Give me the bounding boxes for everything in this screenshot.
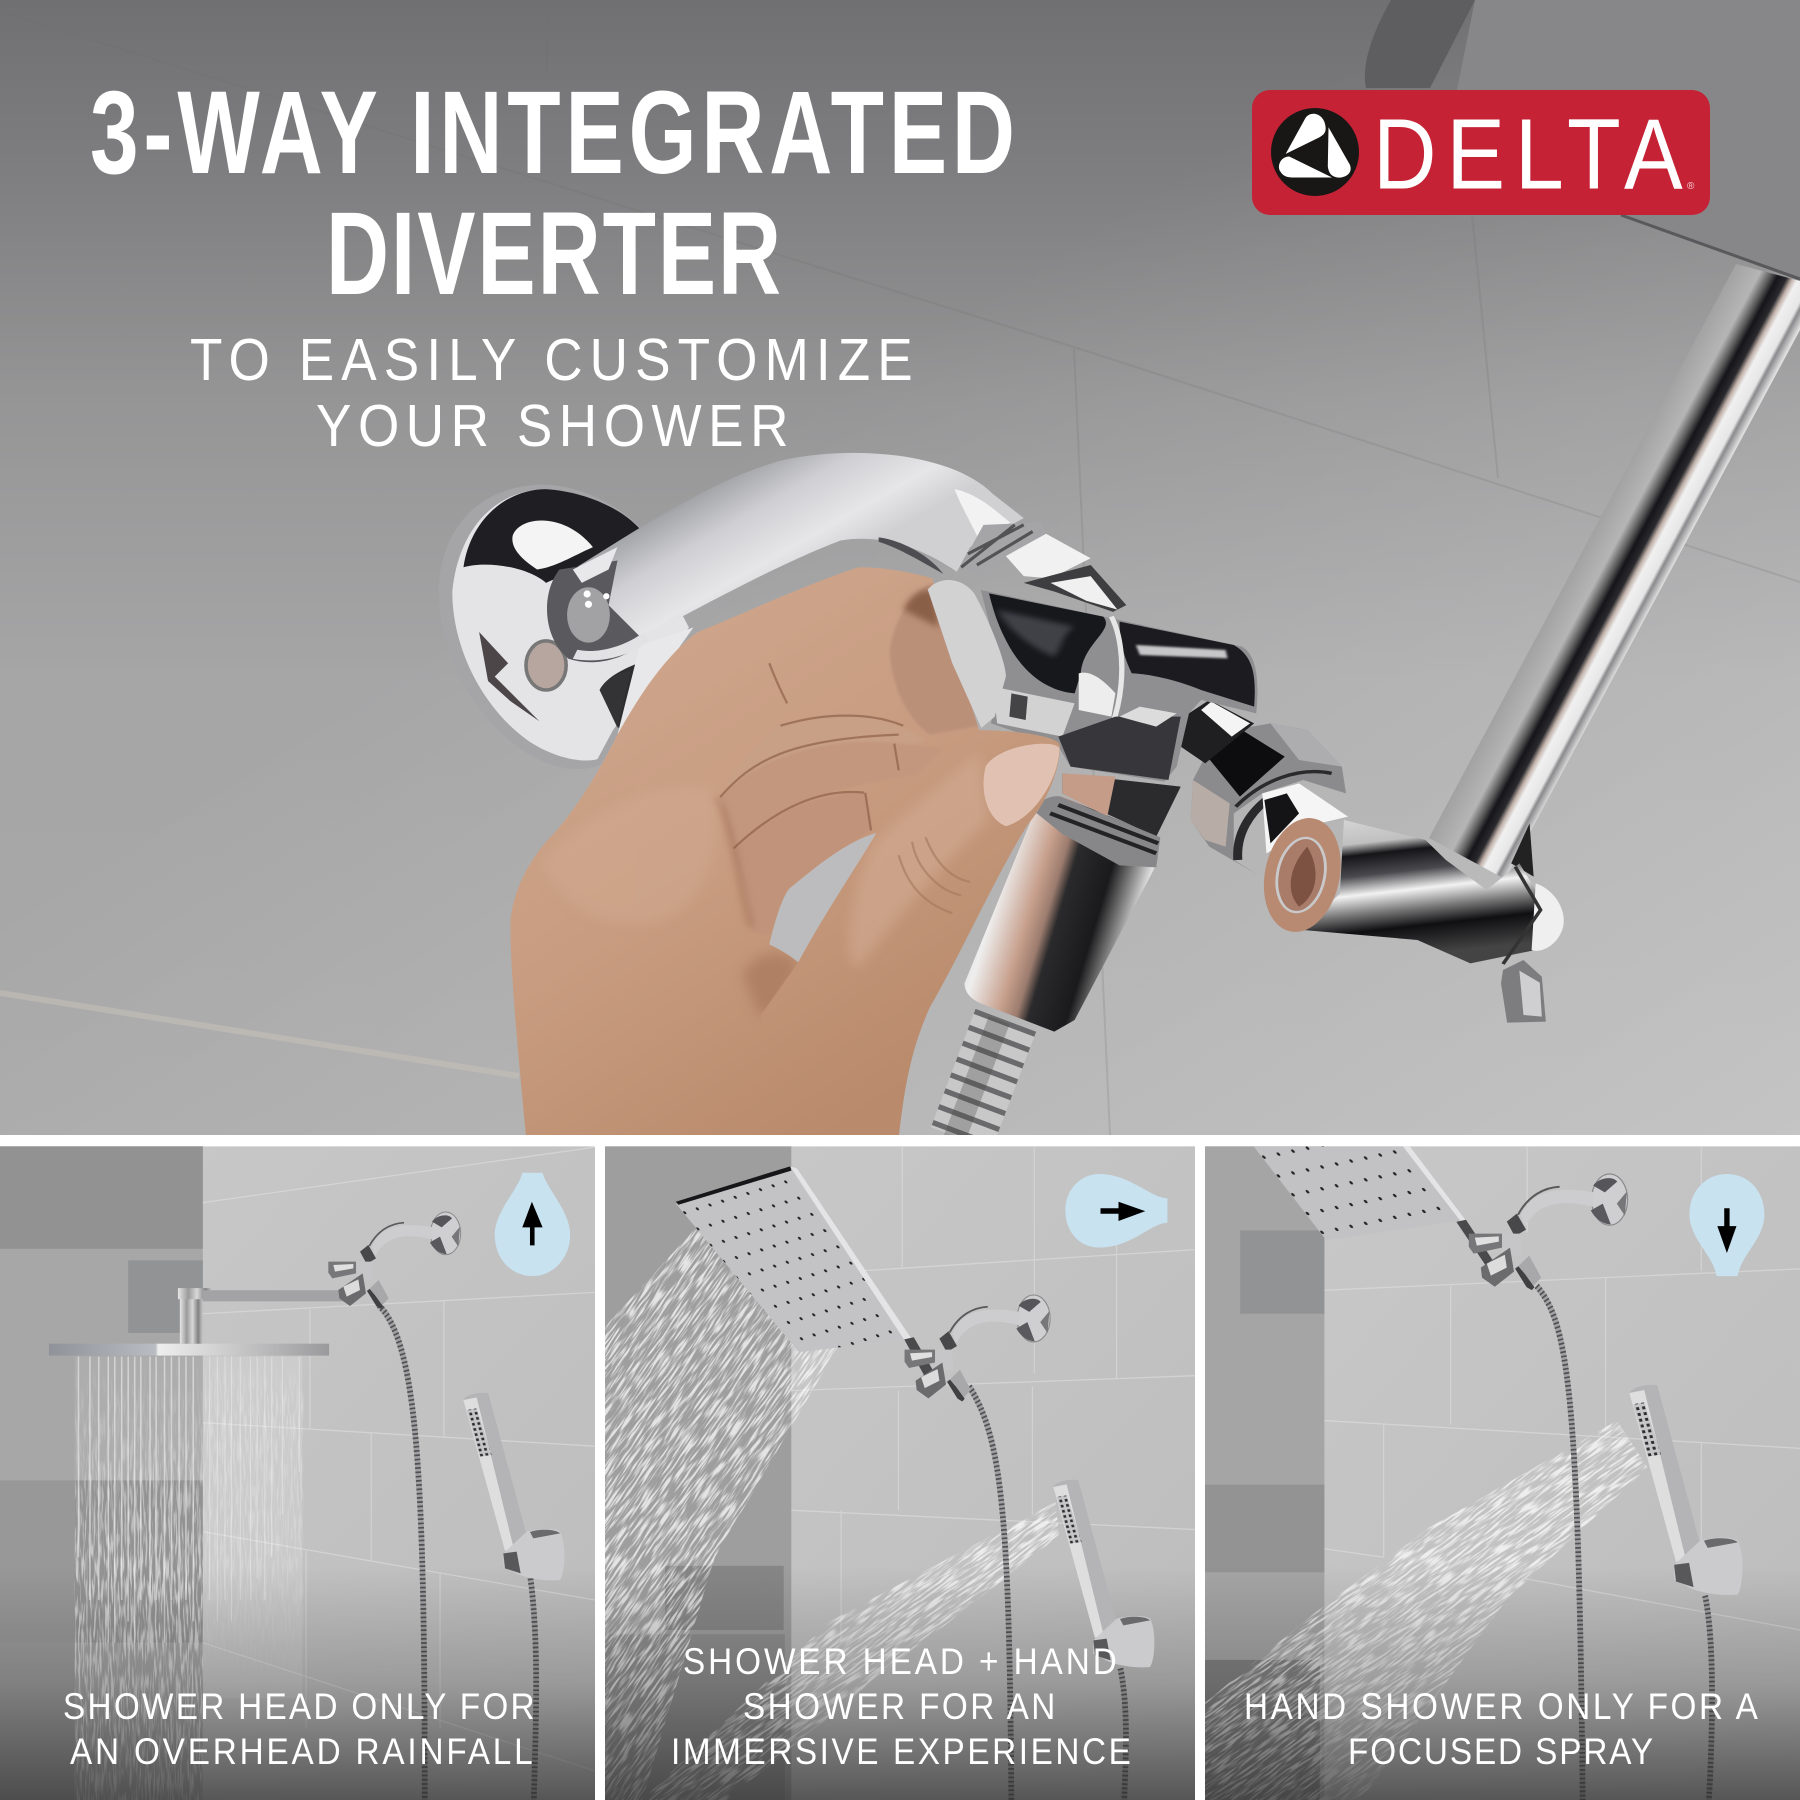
panel: shower head only xyxy=(0,1146,595,1800)
panel 1 hand shower xyxy=(463,1393,564,1580)
threads and nut xyxy=(961,523,1126,612)
caption: hand shower only: FOCUSED SPRAY xyxy=(1348,1731,1653,1772)
overhead shower plate at top right xyxy=(1365,0,1800,281)
drop icon with down arrow xyxy=(1689,1174,1764,1276)
rainfall water xyxy=(75,1356,303,1800)
hose connector xyxy=(964,773,1181,1032)
neck highlight xyxy=(1201,702,1250,737)
caption: shower head only: AN OVERHEAD RAINFALL xyxy=(70,1731,533,1772)
knuckle wrinkles xyxy=(899,837,970,913)
arm underside slit xyxy=(879,537,943,574)
spray from shower head xyxy=(605,1228,845,1800)
hose xyxy=(379,1305,425,1800)
caption: shower head plus hand shower: IMMERSIVE EXPERIENCE xyxy=(671,1731,1131,1772)
copper reflecting knob xyxy=(1264,818,1341,932)
panel: shower head plus hand shower xyxy=(605,1146,1195,1800)
panel 2 wall arm and diverter xyxy=(905,1295,1050,1400)
small under lever xyxy=(1501,960,1546,1023)
title xyxy=(90,66,1015,319)
title: DIVERTER xyxy=(326,187,781,319)
thumb xyxy=(760,730,1060,1136)
bottom shade xyxy=(1205,1566,1800,1800)
caption: hand shower only xyxy=(1244,1686,1758,1772)
wall flange xyxy=(439,485,693,769)
Delta logo xyxy=(1252,90,1710,215)
panel 3 hand shower xyxy=(1629,1385,1743,1595)
horizontal chrome arm xyxy=(1303,820,1536,963)
caption: shower head only xyxy=(63,1686,535,1772)
caption: shower head only: SHOWER HEAD ONLY FOR xyxy=(63,1686,535,1727)
metal hose xyxy=(955,1020,1006,1139)
diverter lever face xyxy=(928,580,1006,728)
shower wall xyxy=(0,1146,595,1800)
lever and thumb xyxy=(760,580,1060,1136)
connector neck xyxy=(1181,700,1254,763)
subtitle: YOUR SHOWER xyxy=(316,392,789,459)
caption: shower head plus hand shower: SHOWER HEAD + HAND xyxy=(683,1641,1117,1682)
wall seen between fingers and thumb xyxy=(769,833,876,962)
chrome stem behind knob xyxy=(1262,783,1348,853)
lower hose xyxy=(1120,1668,1126,1800)
shower head xyxy=(49,1288,329,1356)
spray from hand shower xyxy=(642,1502,1059,1800)
lower hose xyxy=(1705,1596,1712,1800)
shower wall xyxy=(1205,1146,1800,1800)
caption: shower head plus hand shower xyxy=(671,1641,1131,1772)
panel 3 wall arm and diverter xyxy=(1469,1174,1628,1288)
rear mount xyxy=(1511,823,1534,877)
drop icon with up arrow xyxy=(495,1173,570,1276)
title: 3-WAY INTEGRATED xyxy=(90,66,1015,198)
panel: hand shower only xyxy=(1205,1146,1800,1800)
logo wordmark: DELTA xyxy=(1373,98,1683,210)
lower hose xyxy=(530,1574,536,1800)
hex swivel xyxy=(1191,723,1346,875)
hand back and fingers xyxy=(510,567,1060,1136)
caption: hand shower only: HAND SHOWER ONLY FOR A xyxy=(1244,1686,1758,1727)
diverter body xyxy=(981,590,1257,782)
right fixture group traced from side crop xyxy=(1181,700,1564,1023)
thumb highlight xyxy=(849,752,988,967)
end ring xyxy=(1503,867,1541,964)
tile wall background xyxy=(0,0,1800,1135)
shower arm xyxy=(573,453,1024,635)
chrome slide bar xyxy=(1429,264,1800,879)
shower wall xyxy=(605,1146,1195,1800)
subtitle xyxy=(190,326,913,459)
hose xyxy=(969,1386,1011,1800)
thumb nail xyxy=(984,744,1059,826)
bottom shade xyxy=(0,1566,595,1800)
panel: hero photo of hand turning diverter xyxy=(0,0,1800,1139)
logo circle emblem xyxy=(1271,108,1359,196)
finger shading xyxy=(542,583,979,1016)
flange neck ring xyxy=(547,547,649,662)
registered mark: ® xyxy=(1687,181,1695,192)
caption: shower head plus hand shower: SHOWER FOR AN xyxy=(743,1686,1055,1727)
arm highlight near bend xyxy=(955,489,1010,540)
hand shower spray xyxy=(1205,1421,1648,1800)
hose xyxy=(1537,1286,1583,1800)
shower head corner xyxy=(1254,1146,1498,1273)
end cap xyxy=(1532,883,1564,951)
subtitle: TO EASILY CUSTOMIZE xyxy=(190,326,913,393)
panel 1 wall arm and diverter xyxy=(328,1212,461,1307)
panel 2 hand shower xyxy=(1053,1480,1154,1667)
drop icon with right arrow xyxy=(1065,1174,1167,1248)
bottom shade xyxy=(605,1566,1195,1800)
angled shower head xyxy=(676,1166,939,1384)
extension arm xyxy=(203,1290,344,1301)
left fixture and hand traced from close crop xyxy=(439,453,1126,1136)
